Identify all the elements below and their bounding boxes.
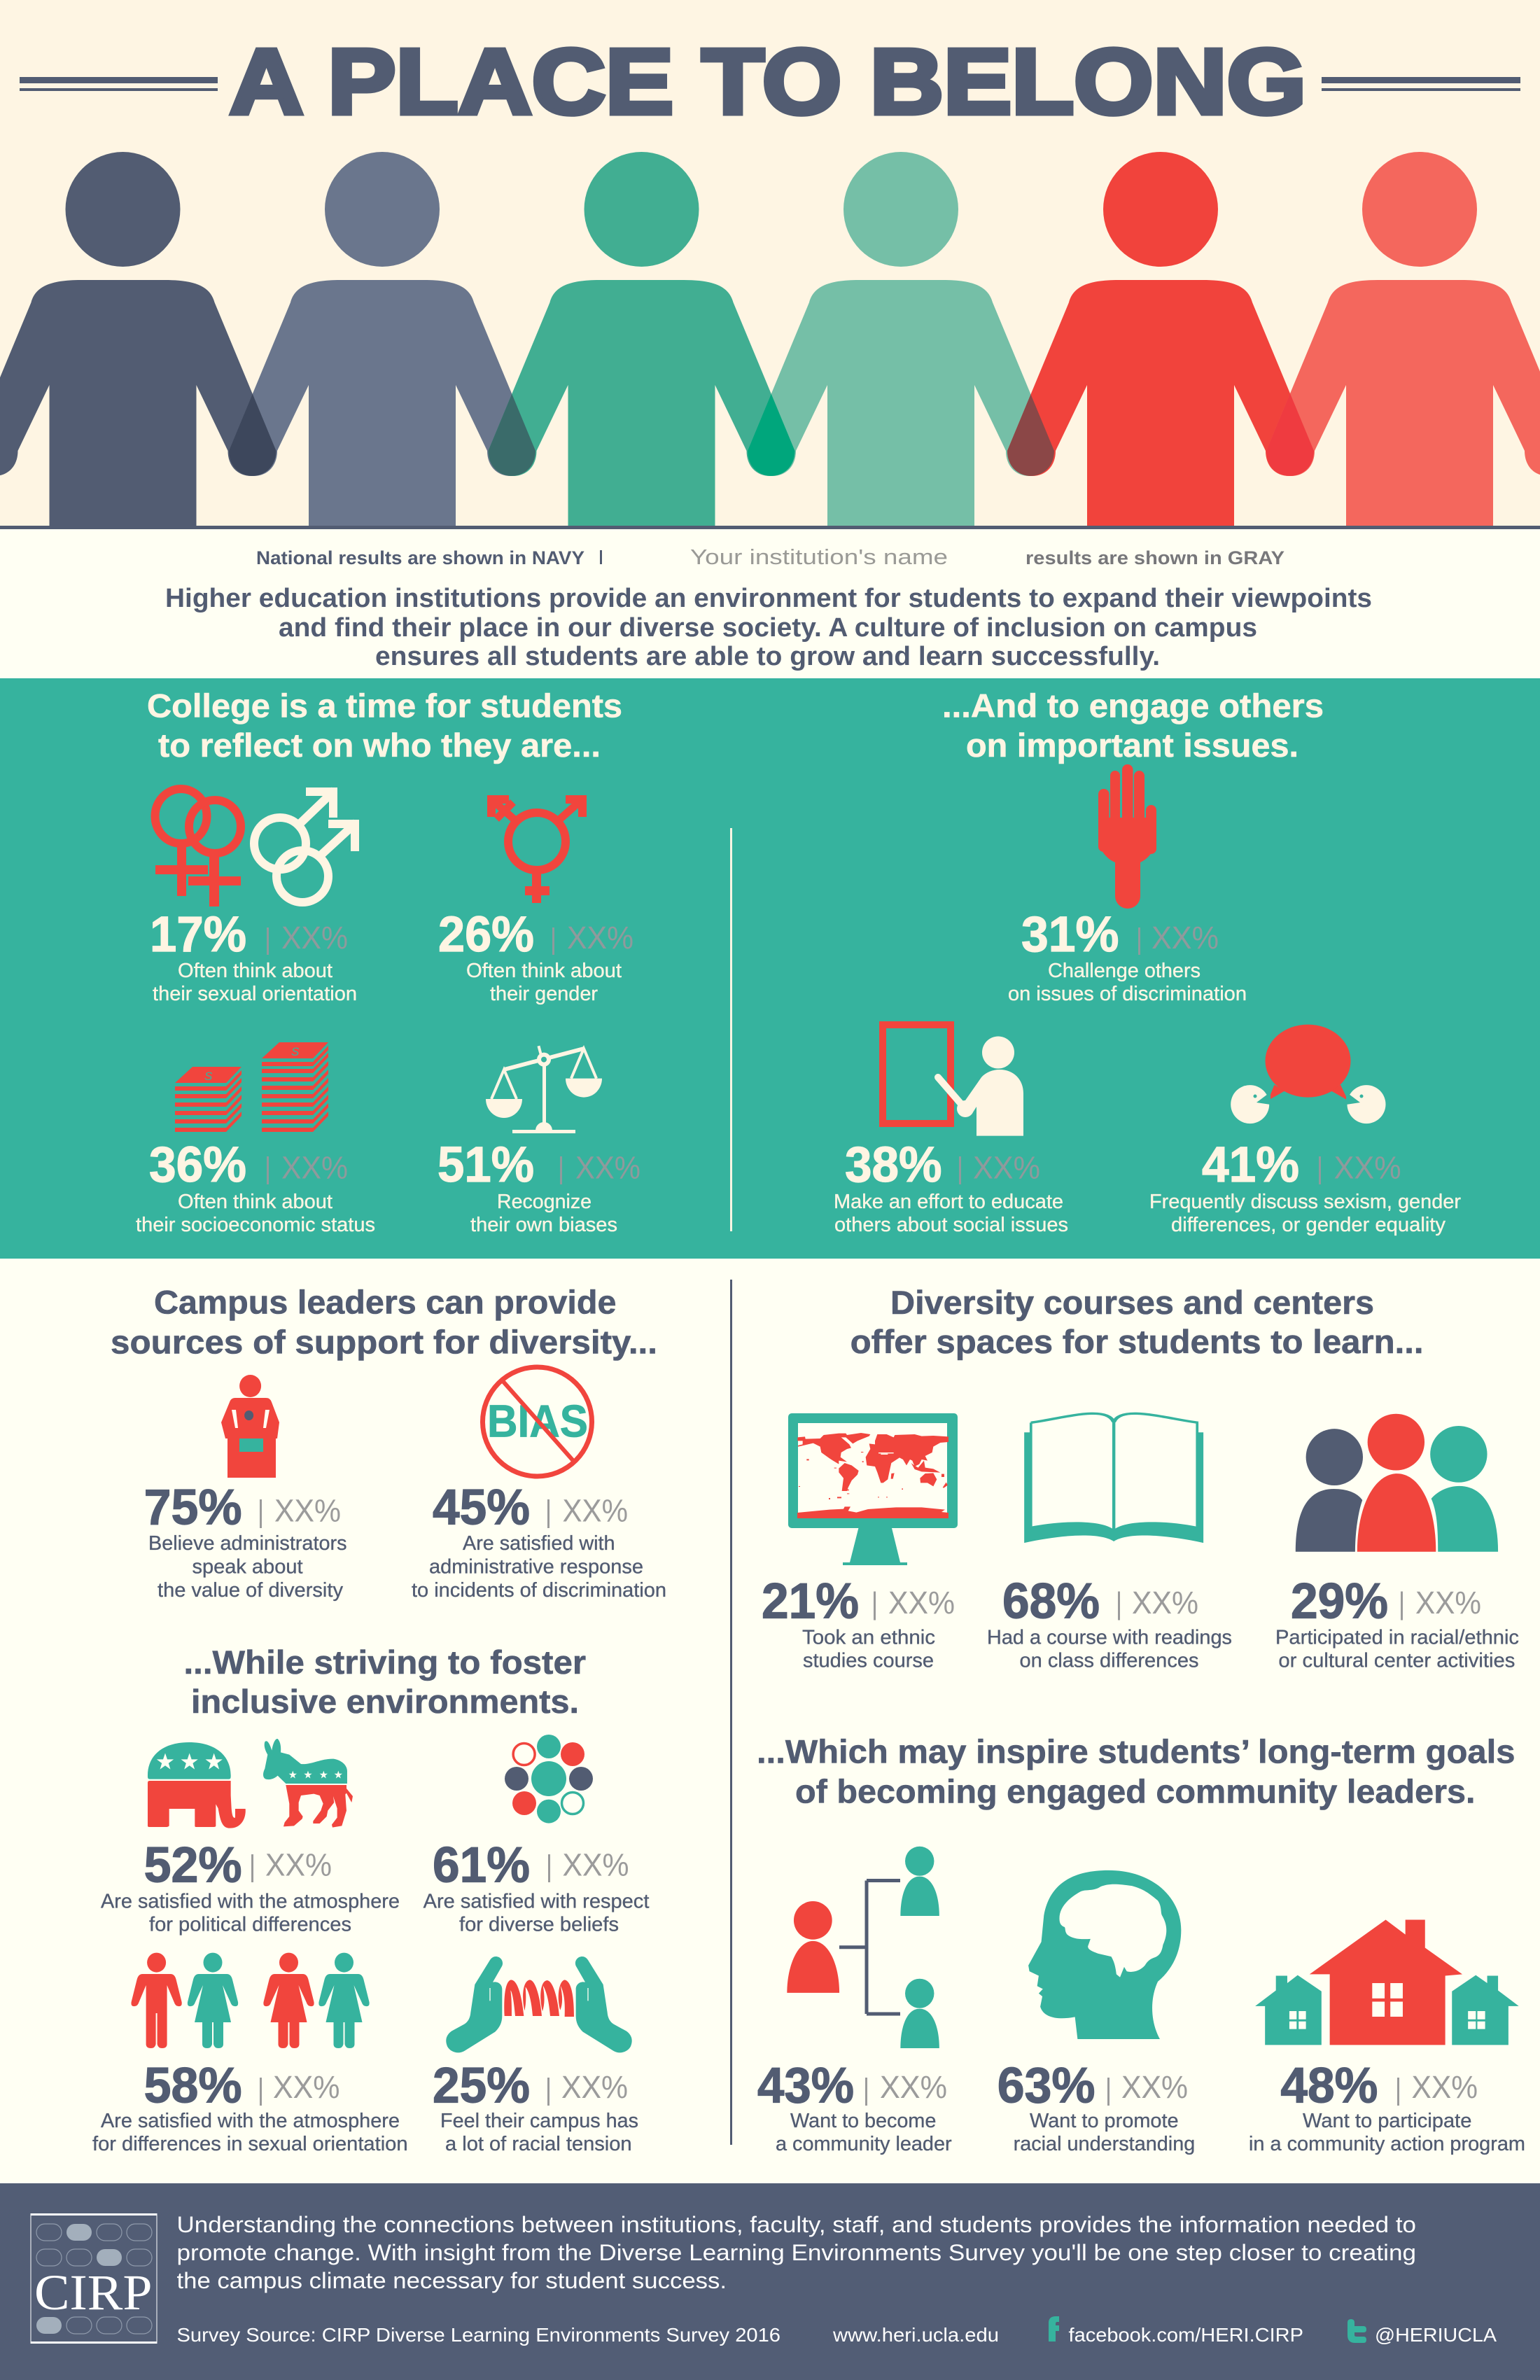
stat: 17%: Often think about [178, 960, 332, 982]
stat: 31%: Challenge others [1048, 960, 1200, 982]
stat: 63% [997, 2058, 1195, 2155]
stat: 75%: XX% [274, 1492, 341, 1529]
footer text [176, 2212, 1416, 2293]
icon: twitter [1348, 2319, 1366, 2343]
heading: diversity courses [850, 1284, 1424, 1360]
icon: monitor with world map [788, 1413, 958, 1565]
stat: 36%: XX% [281, 1149, 348, 1186]
stat: 26%: Often think about [466, 960, 622, 982]
stat: 45%: to incidents of discrimination [412, 1579, 666, 1602]
stat: 51%: 51% [438, 1138, 534, 1193]
legend line [256, 545, 1284, 569]
stat: 43%: XX% [880, 2069, 947, 2105]
panel: campus leaders [111, 1284, 666, 1602]
stat: 36%: Often think about [178, 1191, 332, 1213]
stat: 51%: their own biases [470, 1214, 617, 1236]
heading: diversity courses: offer spaces for students to learn... [850, 1323, 1424, 1360]
stat: 51% [438, 1138, 640, 1236]
icon: head with brain [1028, 1870, 1181, 2039]
stat: 41% [1149, 1138, 1461, 1236]
icon: no bias sign [483, 1367, 592, 1476]
heading: engage [942, 687, 1324, 764]
stat: 75% [144, 1480, 347, 1602]
stat: 61% [424, 1838, 649, 1936]
stat: 58%: 58% [144, 2058, 242, 2114]
stat: 26%: their gender [490, 983, 598, 1005]
stat: 58%: XX% [273, 2069, 340, 2105]
heading: reflect [147, 687, 622, 764]
icon: republican elephant [148, 1742, 246, 1828]
stat: 52%: Are satisfied with the atmosphere [101, 1891, 400, 1913]
stat: 17%: their sexual orientation [153, 983, 357, 1005]
stat: 31%: XX% [1152, 920, 1219, 955]
heading: community leaders: of becoming engaged community leaders. [795, 1772, 1476, 1809]
stat: 21%: studies course [803, 1650, 934, 1672]
stat: 61%: for diverse beliefs [459, 1914, 619, 1936]
footer text: the campus climate necessary for student success. [176, 2268, 727, 2293]
stat: 31%: on issues of discrimination [1008, 983, 1247, 1005]
heading: reflect: to reflect on who they are... [158, 727, 601, 764]
heading: engage: on important issues. [966, 727, 1298, 764]
stat: 45% [412, 1480, 666, 1602]
stat: 43%: a community leader [776, 2133, 952, 2155]
icon: no bias sign: BIAS [487, 1396, 588, 1446]
icon: circle of diverse beliefs [505, 1735, 593, 1823]
stat: 29%: XX% [1415, 1585, 1481, 1620]
icon: balance scale [486, 1046, 602, 1133]
stat: 45%: Are satisfied with [463, 1532, 615, 1555]
stat: 75%: 75% [144, 1480, 242, 1536]
intro paragraph [165, 584, 1372, 671]
legend line: results are shown in GRAY [1026, 547, 1284, 568]
stat: 51%: XX% [575, 1149, 640, 1186]
stat: 63%: 63% [997, 2058, 1095, 2114]
stat: 68%: 68% [1002, 1574, 1100, 1629]
stat: 75%: Believe administrators [148, 1532, 347, 1555]
stat: 68% [987, 1574, 1232, 1672]
column divider [730, 1280, 732, 2145]
stat: 21% [762, 1574, 955, 1672]
icon: transgender symbol [487, 795, 587, 903]
stat: 43% [757, 2058, 952, 2155]
stat: 41%: differences, or gender equality [1171, 1214, 1446, 1236]
heading: campus leaders [111, 1284, 657, 1361]
stat: 21%: Took an ethnic [802, 1626, 935, 1648]
footer text: promote change. With insight from the Diverse Learning Environments Survey you'll be one step closer to creating [176, 2240, 1416, 2265]
stat: 38%: XX% [973, 1149, 1040, 1186]
stat: 17% [150, 907, 357, 1005]
stat: 48%: in a community action program [1249, 2133, 1525, 2155]
stat: 38% [834, 1138, 1068, 1236]
stat: 41%: 41% [1202, 1138, 1299, 1193]
title [20, 30, 1520, 133]
stat: 61%: Are satisfied with respect [424, 1891, 649, 1913]
stat: 31%: 31% [1021, 907, 1119, 962]
stat: 45%: 45% [433, 1480, 530, 1536]
stat: 75%: the value of diversity [158, 1579, 343, 1602]
heading: campus leaders: sources of support for diversity... [111, 1324, 657, 1361]
stat: 29% [1275, 1574, 1519, 1672]
panel: footer [0, 2183, 1540, 2380]
stat: 48%: Want to participate [1303, 2110, 1471, 2132]
stat: 36%: their socioeconomic status [136, 1214, 375, 1236]
stat: 58%: Are satisfied with the atmosphere [101, 2110, 400, 2132]
icon: female and male couple symbols [155, 788, 359, 906]
title: A PLACE TO BELONG [230, 30, 1306, 133]
facebook handle: facebook.com/HERI.CIRP [1068, 2324, 1303, 2346]
stat: 63%: XX% [1121, 2069, 1188, 2105]
icon: speaker at podium [221, 1375, 279, 1478]
header background [0, 0, 1540, 526]
page background [0, 526, 1540, 2380]
stat: 48%: XX% [1411, 2069, 1478, 2105]
stat: 26%: 26% [438, 907, 534, 962]
heading: reflect: College is a time for students [147, 687, 622, 724]
heading: inclusive environments: ...While striving to foster [183, 1644, 586, 1681]
icon: democratic donkey [263, 1739, 353, 1828]
stat: 17%: 17% [150, 907, 246, 962]
stat: 68%: Had a course with readings [987, 1626, 1232, 1648]
stat: 29%: or cultural center activities [1278, 1650, 1515, 1672]
stat: 25%: Feel their campus has [440, 2110, 638, 2132]
heading: campus leaders: Campus leaders can provide [154, 1284, 616, 1320]
intro paragraph: ensures all students are able to grow and learn successfully. [375, 642, 1160, 671]
stat: 25% [433, 2058, 638, 2155]
stat: 52%: XX% [265, 1847, 332, 1882]
legend line: Your institution's name [690, 545, 948, 569]
intro paragraph: Higher education institutions provide an environment for students to expand their viewpoints [165, 584, 1372, 613]
icon: three houses [1255, 1920, 1519, 2045]
icon: three people group [1296, 1414, 1498, 1552]
icon: leader with followers [787, 1847, 939, 2048]
heading: engage: ...And to engage others [942, 687, 1324, 724]
stat: 25%: 25% [433, 2058, 530, 2114]
stat: 61%: 61% [433, 1838, 530, 1893]
footer text: Understanding the connections between institutions, faculty, staff, and students provides the information needed to [176, 2212, 1416, 2237]
icon: two people talking with speech bubble [1231, 1025, 1386, 1124]
panel: community leaders [757, 1733, 1525, 2155]
illustration: row of six people holding hands [0, 152, 1540, 529]
twitter handle: @HERIUCLA [1375, 2324, 1497, 2346]
stat: 48% [1249, 2058, 1525, 2155]
icon: hands compressing spring [446, 1956, 632, 2052]
heading: community leaders: ...Which may inspire students’ long-term goals [757, 1733, 1515, 1770]
stat: 52% [101, 1838, 400, 1936]
stat: 52%: 52% [144, 1838, 242, 1893]
website: www.heri.ucla.edu [832, 2324, 999, 2346]
stat: 38%: others about social issues [834, 1214, 1068, 1236]
stat: 21%: XX% [888, 1585, 955, 1620]
heading: community leaders [757, 1733, 1515, 1809]
logo: CIRP [31, 2213, 157, 2344]
legend line: National results are shown in NAVY [256, 547, 584, 568]
stat: 41%: Frequently discuss sexism, gender [1149, 1191, 1461, 1213]
panel: teal reflection and engagement band [0, 678, 1540, 1259]
heading: diversity courses: Diversity courses and centers [890, 1284, 1374, 1321]
stat: 58%: for differences in sexual orientation [92, 2133, 407, 2155]
icon: open book [1024, 1413, 1203, 1543]
stat: 63%: racial understanding [1014, 2133, 1195, 2155]
icon: stacks of money: S [204, 1070, 213, 1083]
stat: 36% [136, 1138, 375, 1236]
intro paragraph: and find their place in our diverse society. A culture of inclusion on campus [279, 613, 1257, 643]
stat: 29%: 29% [1291, 1574, 1388, 1629]
stat: 45%: XX% [563, 1492, 628, 1529]
stat: 38%: Make an effort to educate [834, 1191, 1063, 1213]
stat: 36%: 36% [149, 1138, 246, 1193]
stat: 26% [438, 907, 634, 1005]
icon: raised hand [1098, 764, 1156, 909]
panel: inclusive environments [92, 1644, 649, 2155]
stat: 52%: for political differences [149, 1914, 351, 1936]
stat: 58% [92, 2058, 407, 2155]
stat: 61%: XX% [563, 1847, 629, 1882]
icon: four figures [131, 1953, 370, 2048]
stat: 68%: XX% [1132, 1585, 1198, 1620]
stat: 43%: 43% [757, 2058, 854, 2114]
icon: stacks of money: S [291, 1045, 300, 1058]
heading: inclusive environments: inclusive environments. [191, 1683, 579, 1720]
icon: stacks of money [175, 1042, 328, 1132]
survey source: Survey Source: CIRP Diverse Learning Environments Survey 2016 [176, 2324, 780, 2346]
icon: facebook [1049, 2316, 1059, 2342]
stat: 48%: 48% [1280, 2058, 1378, 2114]
icon: teacher at board [883, 1025, 1023, 1136]
stat: 68%: on class differences [1019, 1650, 1198, 1672]
stat: 17%: XX% [281, 920, 348, 955]
heading: inclusive environments [183, 1644, 586, 1720]
logo: CIRP: CIRP [34, 2264, 153, 2320]
stat: 41%: XX% [1334, 1149, 1401, 1186]
stat: 29%: Participated in racial/ethnic [1275, 1626, 1519, 1648]
stat: 31% [1008, 907, 1247, 1005]
stat: 25%: XX% [561, 2069, 628, 2105]
stat: 25%: a lot of racial tension [445, 2133, 632, 2155]
stat: 26%: XX% [567, 920, 634, 955]
stat: 63%: Want to promote [1030, 2110, 1179, 2132]
stat: 21%: 21% [762, 1574, 859, 1629]
stat: 51%: Recognize [497, 1191, 592, 1213]
stat: 43%: Want to become [790, 2110, 936, 2132]
panel: diversity courses [762, 1284, 1519, 1672]
stat: 75%: speak about [192, 1555, 302, 1578]
stat: 38%: 38% [845, 1138, 942, 1193]
stat: 45%: administrative response [429, 1555, 643, 1578]
